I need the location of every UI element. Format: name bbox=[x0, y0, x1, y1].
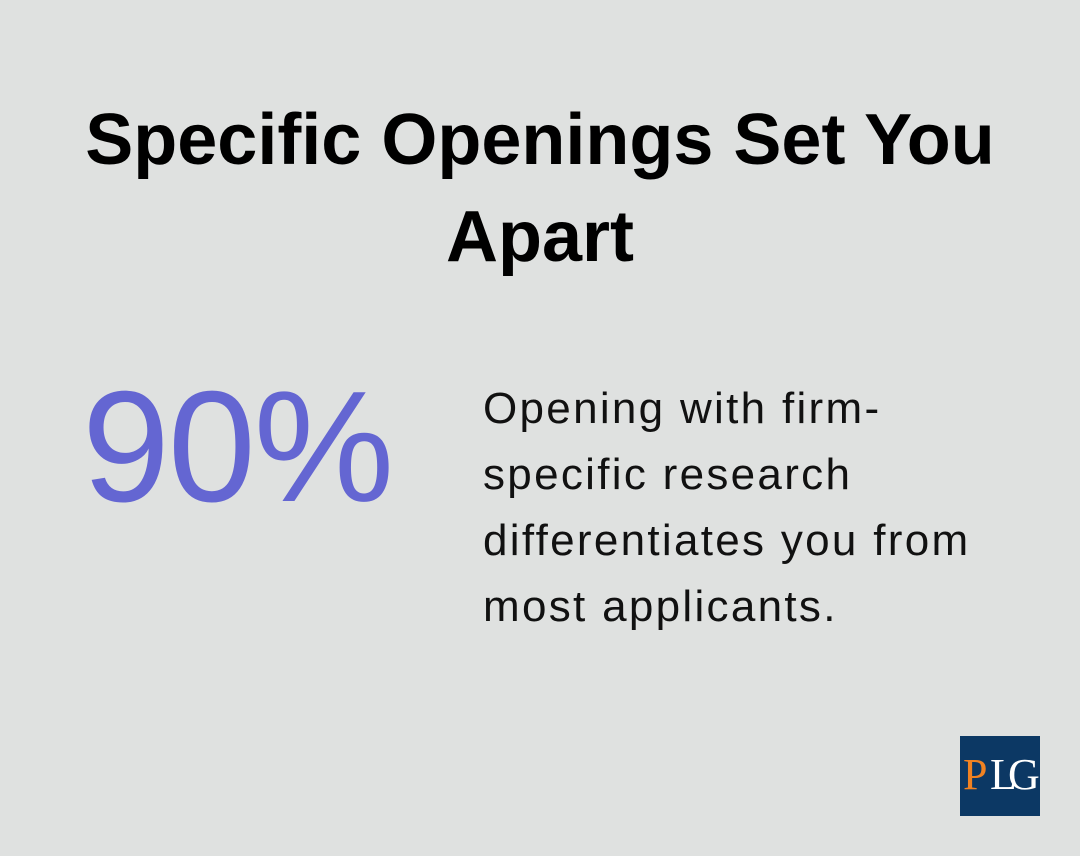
title: Apart bbox=[446, 197, 634, 277]
logo: PLG: G bbox=[1008, 750, 1040, 799]
logo: PLG: P bbox=[963, 750, 987, 799]
description text: most applicants. bbox=[483, 582, 838, 631]
title: Specific Openings Set You bbox=[85, 100, 995, 180]
stat: 90%: 90% bbox=[82, 359, 392, 535]
title bbox=[85, 100, 995, 277]
logo: PLG bbox=[960, 736, 1040, 816]
description text bbox=[483, 384, 970, 631]
description text: specific research bbox=[483, 450, 852, 499]
description text: Opening with firm- bbox=[483, 384, 881, 433]
logo: PLG: L bbox=[990, 750, 1017, 799]
description text: differentiates you from bbox=[483, 516, 970, 565]
